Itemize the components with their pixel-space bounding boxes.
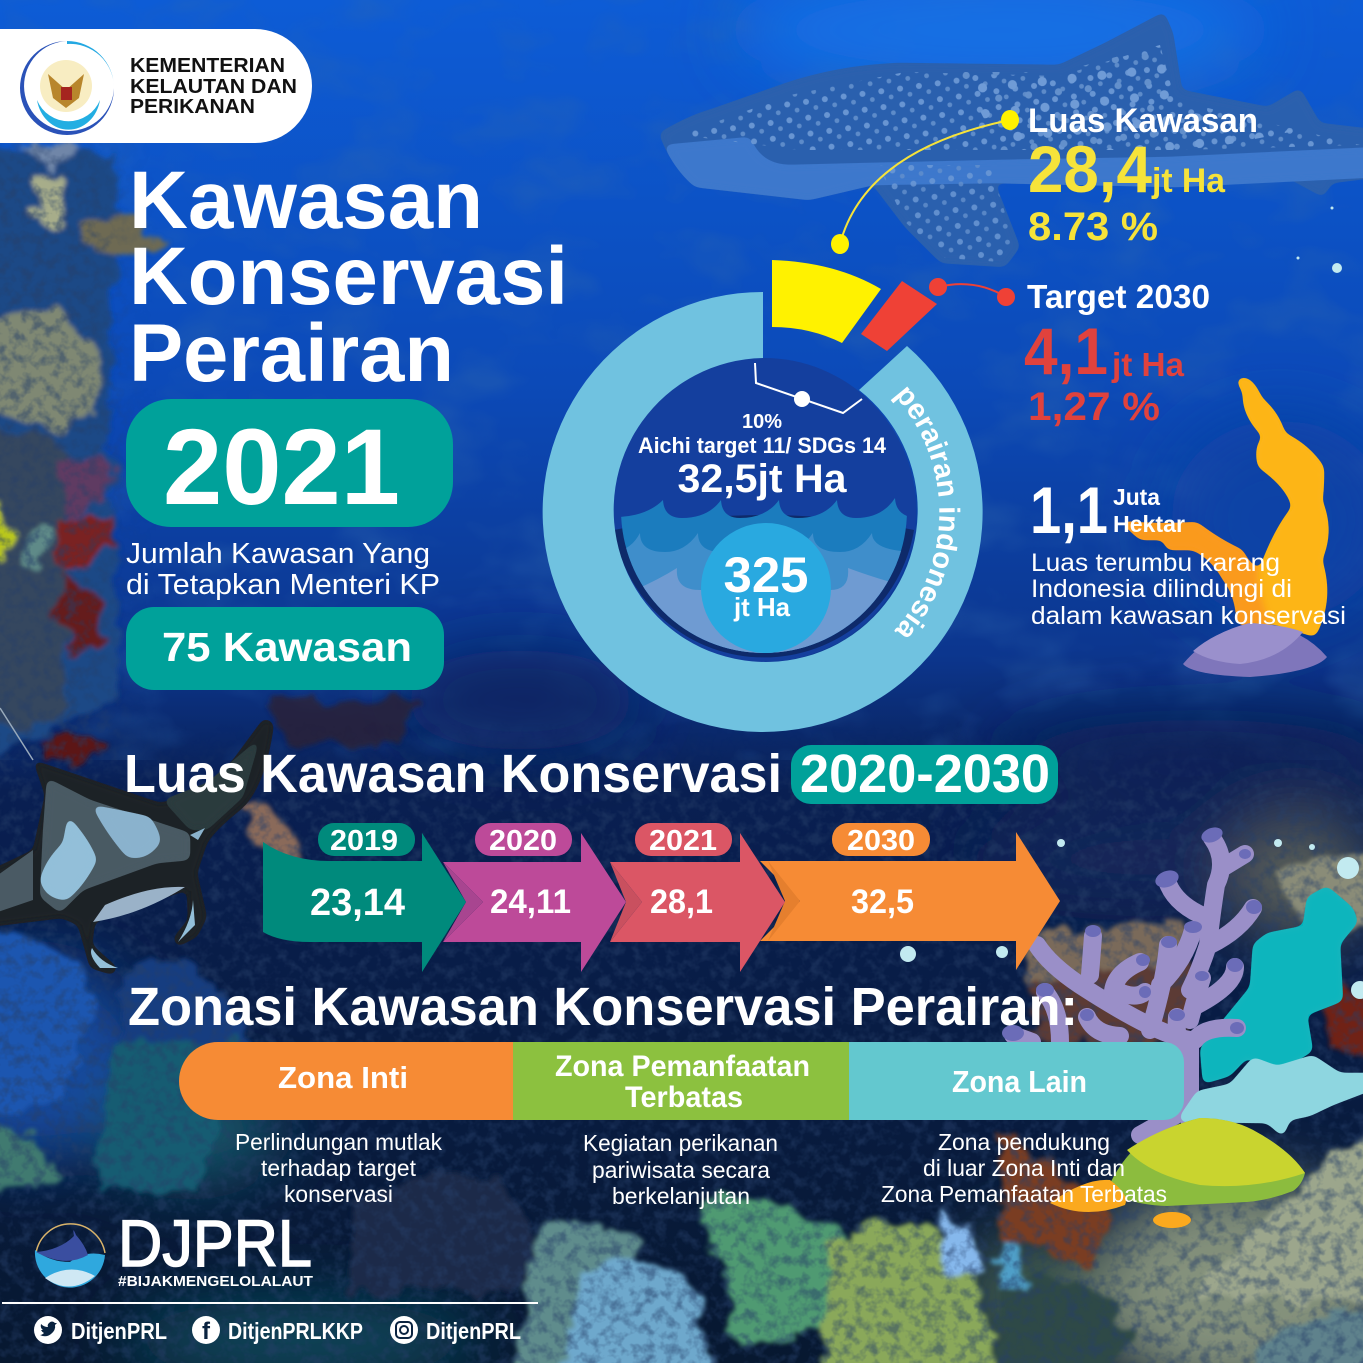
zona pemanfaatan terbatas bbox=[513, 1042, 849, 1120]
stat: luas kawasan: Luas Kawasan bbox=[1028, 102, 1258, 140]
donut center text: jt Ha bbox=[733, 592, 791, 622]
zone descriptions bbox=[235, 1129, 1167, 1209]
DJPRL logo bbox=[35, 1206, 313, 1290]
arrow 2019: 2019 bbox=[330, 825, 398, 857]
stat: target 2030: 4,1 bbox=[1024, 314, 1108, 388]
purple coral bbox=[1002, 825, 1262, 1140]
red callout line bbox=[929, 278, 1015, 306]
arrow 2019: 23,14 bbox=[310, 882, 405, 924]
logo icon bbox=[35, 1224, 105, 1288]
orange blobs bbox=[1050, 1180, 1191, 1228]
title: Perairan bbox=[129, 308, 454, 399]
ministry name: PERIKANAN bbox=[130, 96, 255, 118]
manta ray bbox=[0, 708, 274, 975]
footer divider bbox=[2, 1302, 538, 1304]
75 kawasan badge bbox=[126, 607, 444, 690]
stat: terumbu karang: Hektar bbox=[1113, 511, 1185, 537]
325 circle bbox=[701, 523, 831, 653]
title: Konservasi bbox=[129, 231, 568, 322]
yellow segment bbox=[772, 260, 881, 343]
zona inti bbox=[179, 1042, 513, 1120]
stat: luas kawasan: 28,4 bbox=[1028, 132, 1152, 206]
social: instagram bbox=[390, 1316, 521, 1344]
heading: zonasi: Zonasi Kawasan Konservasi Perairan: bbox=[128, 977, 1078, 1037]
DJPRL logo: DJPRL bbox=[118, 1206, 312, 1280]
zona lain description: Zona Pemanfaatan Terbatas bbox=[881, 1181, 1167, 1207]
arrow 2021 bbox=[610, 823, 785, 972]
stat: terumbu karang: dalam kawasan konservasi bbox=[1031, 602, 1346, 630]
social: twitter: DitjenPRL bbox=[71, 1318, 167, 1344]
zona lain description: Zona pendukung bbox=[938, 1129, 1110, 1155]
green mound bbox=[1107, 1118, 1305, 1206]
donut center text: Aichi target 11/ SDGs 14 bbox=[638, 433, 887, 458]
stat: terumbu karang: Indonesia dilindungi di bbox=[1031, 575, 1292, 603]
subtitle text bbox=[126, 538, 440, 601]
heading: luas kawasan 2020-2030: 2020-2030 bbox=[800, 744, 1050, 804]
social: facebook: DitjenPRLKKP bbox=[228, 1318, 363, 1344]
subtitle text: di Tetapkan Menteri KP bbox=[126, 569, 440, 601]
ring label: perairan indonesia bbox=[890, 386, 960, 637]
75 kawasan badge: 75 Kawasan bbox=[162, 624, 412, 670]
arrow 2021: 2021 bbox=[649, 825, 717, 857]
yellow callout line bbox=[831, 110, 1019, 254]
year badge: 2021 bbox=[163, 406, 400, 527]
year badge bbox=[126, 399, 453, 527]
logo panel bbox=[0, 29, 312, 143]
title bbox=[129, 155, 568, 399]
ministry name bbox=[130, 55, 297, 118]
zona pemanfaatan terbatas: Zona Pemanfaatan bbox=[555, 1050, 810, 1083]
arrow 2020: 24,11 bbox=[490, 883, 571, 921]
arrow 2021: 28,1 bbox=[650, 883, 713, 921]
zona pemanfaatan description bbox=[583, 1130, 778, 1209]
coral: left reef bbox=[0, 145, 420, 860]
stat: terumbu karang: Juta bbox=[1113, 484, 1160, 510]
zona inti description: terhadap target bbox=[261, 1155, 417, 1181]
timeline arrows bbox=[263, 823, 1060, 972]
ministry name: KEMENTERIAN bbox=[130, 55, 285, 77]
seaweed illustration bbox=[1118, 377, 1328, 637]
bracket connector bbox=[755, 363, 862, 413]
arrow 2030: 2030 bbox=[847, 825, 915, 857]
arrow 2020 bbox=[443, 823, 626, 972]
whale shark bbox=[659, 12, 1363, 267]
bubbles bbox=[900, 206, 1363, 999]
light teal leaf bbox=[1180, 1055, 1363, 1137]
social: facebook: f bbox=[202, 1318, 211, 1345]
donut center text: 32,5jt Ha bbox=[678, 457, 847, 501]
ministry emblem bbox=[20, 41, 114, 135]
zona inti: Zona Inti bbox=[278, 1060, 408, 1095]
zona lain description: di luar Zona Inti dan bbox=[923, 1155, 1125, 1181]
zona lain bbox=[849, 1042, 1184, 1120]
stat: luas kawasan: 8.73 % bbox=[1028, 205, 1158, 249]
outer ring bbox=[543, 292, 983, 732]
red segment bbox=[861, 281, 937, 351]
DJPRL logo: #BIJAKMENGELOLALAUT bbox=[118, 1273, 313, 1290]
stat: luas kawasan bbox=[1028, 102, 1258, 249]
arrow 2030 bbox=[760, 823, 1060, 970]
zona pemanfaatan description: berkelanjutan bbox=[612, 1183, 750, 1209]
social: facebook bbox=[192, 1316, 363, 1345]
teal leaf bbox=[1200, 886, 1358, 1084]
donut center text bbox=[638, 411, 887, 622]
title: Kawasan bbox=[129, 155, 483, 246]
donut center text: 10% bbox=[742, 411, 782, 433]
stat: target 2030: 1,27 % bbox=[1028, 385, 1160, 429]
stat: terumbu karang bbox=[1030, 473, 1346, 630]
zone bar bbox=[179, 1042, 1184, 1120]
arrow 2019 bbox=[263, 823, 466, 972]
zona lain: Zona Lain bbox=[952, 1064, 1087, 1099]
stat: luas kawasan: jt Ha bbox=[1151, 162, 1226, 200]
stat: target 2030 bbox=[1024, 278, 1210, 429]
zona inti description bbox=[235, 1129, 442, 1207]
donut chart bbox=[542, 260, 983, 732]
arrow 2030: 32,5 bbox=[851, 883, 914, 921]
donut center text: 325 bbox=[724, 547, 808, 603]
arrow 2020: 2020 bbox=[489, 825, 557, 857]
subtitle text: Jumlah Kawasan Yang bbox=[126, 538, 430, 570]
zona inti description: Perlindungan mutlak bbox=[235, 1129, 442, 1155]
social: twitter bbox=[34, 1316, 167, 1344]
stat: target 2030: Target 2030 bbox=[1027, 278, 1210, 315]
purple rock bbox=[1183, 623, 1327, 677]
stat: target 2030: jt Ha bbox=[1111, 346, 1185, 383]
inner circle with waves bbox=[610, 358, 920, 662]
stat: terumbu karang: Luas terumbu karang bbox=[1031, 549, 1280, 577]
corals lower right bbox=[900, 206, 1363, 1228]
ministry name: KELAUTAN DAN bbox=[130, 76, 297, 98]
zona pemanfaatan description: Kegiatan perikanan bbox=[583, 1130, 778, 1156]
coral: lower reef bbox=[0, 856, 1363, 1363]
zona pemanfaatan terbatas: Terbatas bbox=[625, 1081, 743, 1114]
heading: luas kawasan 2020-2030: Luas Kawasan Konservasi bbox=[124, 744, 782, 804]
zona inti description: konservasi bbox=[284, 1181, 393, 1207]
social: instagram: DitjenPRL bbox=[426, 1318, 521, 1344]
zona lain description bbox=[881, 1129, 1167, 1207]
zona pemanfaatan description: pariwisata secara bbox=[592, 1157, 770, 1183]
stat: terumbu karang: 1,1 bbox=[1030, 473, 1108, 547]
